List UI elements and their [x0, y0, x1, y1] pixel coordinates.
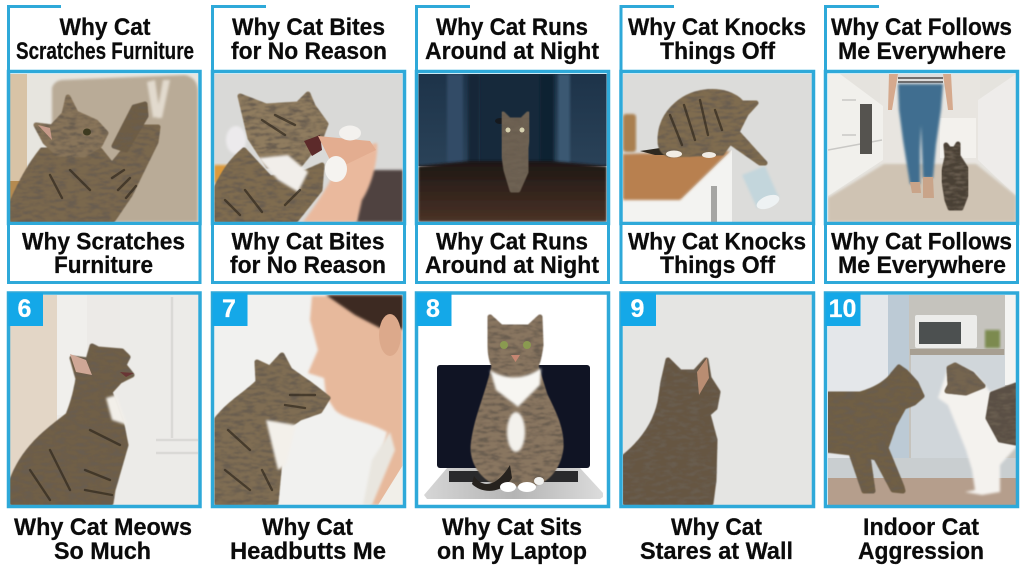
panel 3: why cat runs around at night	[416, 6, 608, 282]
photo frame	[212, 293, 404, 506]
panel 9: why cat stares at wall	[621, 293, 814, 565]
panel 4: why cat knocks things off	[621, 6, 814, 282]
lower caption: Why Cat Knocks	[628, 228, 806, 256]
number badge 6: 6	[18, 295, 31, 323]
top heading	[16, 14, 194, 65]
top label border bracket	[621, 6, 674, 70]
top heading: for No Reason	[231, 38, 387, 65]
top heading	[231, 14, 387, 65]
photo frame	[8, 293, 200, 506]
photo: two cats facing off in a kitchen	[826, 295, 1018, 505]
top heading: Why Cat	[60, 14, 151, 41]
lower caption: Why Cat Follows	[831, 228, 1012, 256]
panel 6: why cat meows so much	[8, 293, 200, 565]
lower caption	[425, 228, 599, 279]
number badge 8	[416, 293, 452, 326]
photo frame	[416, 293, 608, 506]
lower caption: Why Cat Bites	[232, 228, 384, 256]
panel 8: why cat sits on my laptop	[416, 293, 608, 565]
top heading: Me Everywhere	[838, 38, 1006, 65]
photo frame	[212, 72, 404, 224]
number badge 9	[621, 293, 656, 326]
lower caption	[230, 228, 386, 279]
photo frame	[621, 72, 814, 224]
lower caption	[628, 228, 806, 279]
caption: Why Cat	[262, 514, 353, 541]
photo frame	[8, 72, 200, 224]
top label border bracket	[416, 6, 470, 70]
photo frame	[826, 293, 1018, 506]
photo: cat headbutting a woman	[214, 295, 403, 505]
lower caption box	[416, 224, 608, 282]
number badge 10: 10	[829, 295, 856, 323]
caption: Stares at Wall	[640, 538, 793, 565]
photo: cat scratching sofa	[10, 74, 198, 222]
lower caption box	[621, 224, 814, 282]
caption	[640, 514, 793, 565]
top heading	[831, 14, 1012, 65]
photo: cat following a person in a kitchen	[828, 74, 1016, 222]
top heading: Scratches Furniture	[16, 38, 194, 65]
lower caption: Things Off	[660, 252, 776, 279]
lower caption: Around at Night	[425, 252, 599, 279]
photo: cat staring at wall from behind	[623, 295, 812, 505]
caption	[230, 514, 386, 565]
caption: Why Cat Meows	[14, 514, 192, 541]
number badge 9: 9	[631, 295, 644, 323]
lower caption box	[8, 224, 200, 282]
photo frame	[826, 72, 1018, 224]
caption	[858, 514, 984, 565]
panel 7: why cat headbutts me	[212, 293, 404, 565]
caption: Headbutts Me	[230, 538, 386, 565]
panel 2: why cat bites for no reason	[212, 6, 404, 282]
top heading: Why Cat Follows	[831, 14, 1012, 41]
photo: cat sitting on a laptop	[424, 314, 603, 499]
top heading	[425, 14, 599, 65]
caption: Aggression	[858, 538, 984, 565]
top label border bracket	[826, 6, 879, 70]
top label border bracket	[212, 6, 266, 70]
caption: So Much	[54, 538, 151, 565]
top heading: Things Off	[660, 38, 776, 65]
lower caption	[831, 228, 1012, 279]
panel 1: why cat scratches furniture	[8, 6, 200, 282]
lower caption box	[212, 224, 404, 282]
number badge 7	[212, 293, 248, 326]
panel 5: why cat follows me everywhere	[826, 6, 1018, 282]
top heading	[628, 14, 806, 65]
top heading: Why Cat Bites	[232, 14, 385, 41]
top heading: Why Cat Knocks	[628, 14, 806, 41]
number badge 10	[826, 293, 860, 326]
lower caption: for No Reason	[230, 252, 386, 279]
number badge 7: 7	[222, 295, 236, 323]
lower caption: Me Everywhere	[838, 252, 1006, 279]
caption	[14, 514, 192, 565]
caption: Indoor Cat	[863, 514, 979, 541]
lower caption: Why Cat Runs	[436, 228, 588, 256]
number badge 6	[8, 293, 43, 326]
photo: cat pushing cup off counter	[623, 74, 812, 222]
photo frame	[416, 72, 608, 224]
lower caption box	[826, 224, 1018, 282]
top label border bracket	[8, 6, 61, 70]
photo: cat running in dark hallway	[418, 74, 607, 222]
caption: Why Cat Sits	[442, 514, 582, 541]
top heading: Around at Night	[425, 38, 599, 65]
photo: cat biting a hand	[214, 74, 403, 222]
number badge 8: 8	[426, 295, 440, 323]
caption: Why Cat	[671, 514, 762, 541]
photo frame	[621, 293, 814, 506]
lower caption: Why Scratches	[22, 228, 185, 256]
top heading: Why Cat Runs	[436, 14, 588, 41]
photo: cat meowing at door	[10, 295, 198, 505]
lower caption	[22, 228, 185, 279]
caption	[437, 514, 587, 565]
caption: on My Laptop	[437, 538, 587, 565]
panel 10: indoor cat aggression	[826, 293, 1018, 565]
lower caption: Furniture	[54, 252, 153, 279]
